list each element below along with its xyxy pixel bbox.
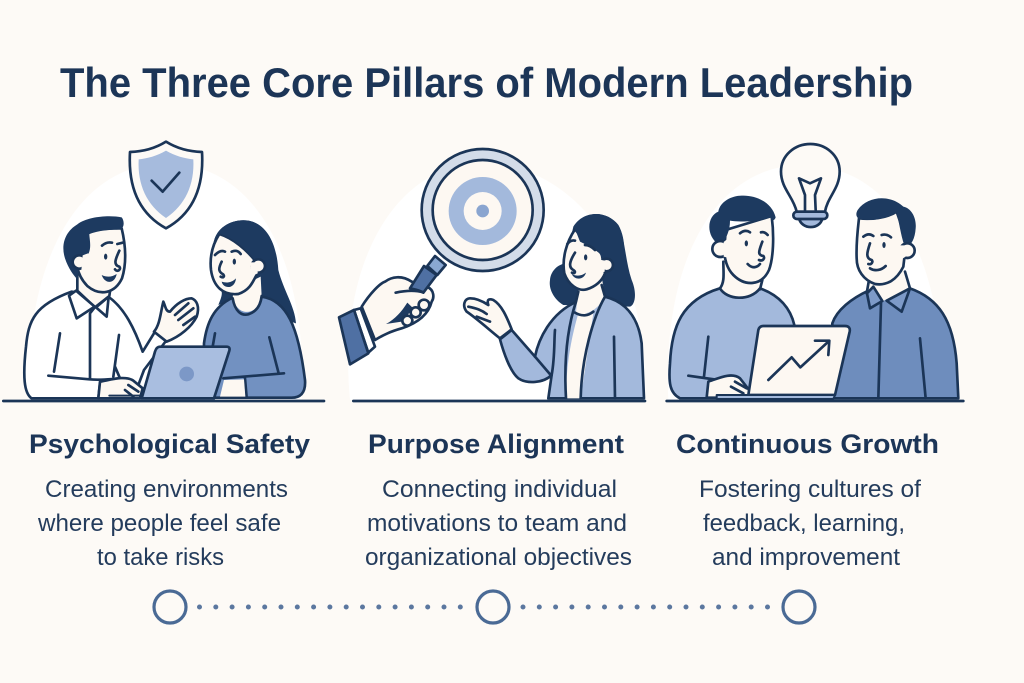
table line: [3, 397, 324, 405]
text: purpose alignment description: [365, 476, 632, 571]
icon: shield with check: [130, 142, 202, 228]
figure: left man in blue sweater: [669, 196, 794, 398]
background dome: [28, 163, 302, 400]
title: The Three Core Pillars of Modern Leadership: [60, 59, 913, 106]
text: psychological safety description: to take risks: [97, 544, 224, 571]
icon: magnifying glass: [422, 149, 544, 275]
text: purpose alignment description: motivations to team and: [367, 510, 627, 537]
text: psychological safety description: Creating environments: [45, 476, 288, 503]
panel: psychological safety: [3, 142, 324, 571]
text: purpose alignment description: organizational objectives: [365, 544, 632, 571]
icon: light bulb: [781, 144, 840, 227]
text: purpose alignment description: Connecting individual: [382, 476, 617, 503]
illustration: team conversation: [3, 142, 324, 401]
text: psychological safety description: [37, 476, 288, 571]
background dome: [348, 163, 645, 400]
icon: hand holding magnifier: [339, 266, 437, 364]
table line: [353, 397, 645, 405]
panel: continuous growth: [667, 144, 963, 571]
heading: continuous growth: Continuous Growth: [676, 429, 939, 459]
icon: laptop with growth chart: [717, 326, 850, 399]
figure: woman in light blue blazer: [464, 214, 644, 398]
icon: laptop: [109, 347, 230, 398]
figure: right man in dark blue shirt: [832, 198, 958, 398]
text: continuous growth description: Fostering cultures of: [699, 476, 921, 503]
illustration: two men with laptop: [667, 144, 963, 401]
figure: woman in blue sweater: [204, 220, 305, 398]
table line: [667, 397, 963, 405]
timeline with three nodes: [154, 591, 815, 623]
heading: psychological safety: Psychological Safety: [29, 429, 310, 459]
text: continuous growth description: feedback, learning,: [703, 510, 905, 537]
text: continuous growth description: and improvement: [712, 544, 900, 571]
text: continuous growth description: [699, 476, 921, 571]
text: psychological safety description: where people feel safe: [37, 510, 281, 537]
figure: man in white shirt: [24, 216, 198, 398]
background dome: [668, 165, 942, 400]
panel: purpose alignment: [339, 149, 645, 571]
illustration: magnifying glass and woman: [339, 149, 645, 401]
heading: purpose alignment: Purpose Alignment: [368, 429, 624, 459]
